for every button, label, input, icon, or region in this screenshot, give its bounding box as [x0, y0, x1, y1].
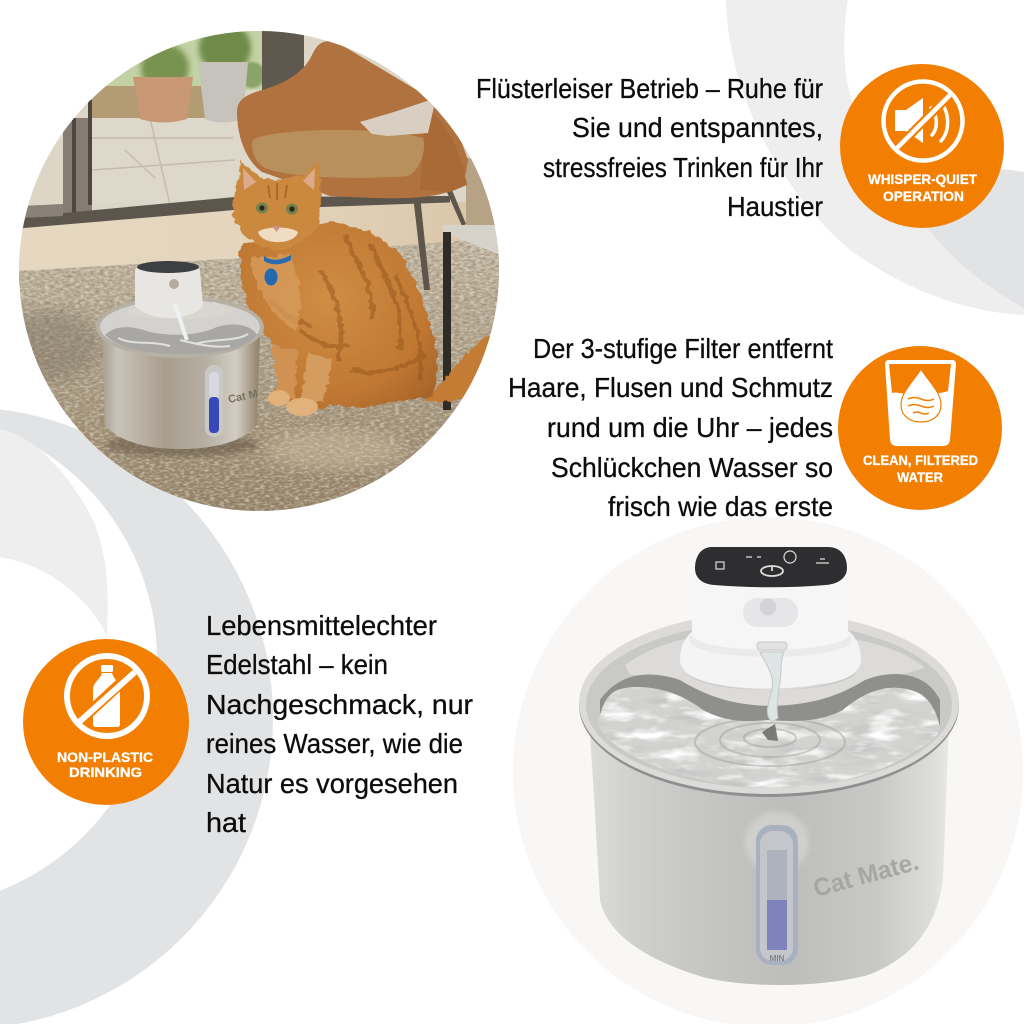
water stream [760, 652, 784, 722]
front legs [272, 345, 297, 398]
text block: stainless steel: Natur es vorgesehen [206, 768, 458, 799]
head [232, 160, 321, 250]
side table [443, 225, 500, 410]
paws [268, 390, 290, 406]
fountain body [589, 720, 949, 985]
text block: filter: frisch wie das erste [608, 491, 833, 522]
small fountain in photo [96, 261, 264, 457]
cat [232, 160, 437, 416]
icon: muted speaker [884, 82, 962, 160]
badge: clean filtered water: WATER [897, 469, 943, 485]
text block: filter: Der 3-stufige Filter entfernt [533, 333, 833, 364]
product backdrop circle [513, 517, 1023, 1024]
text block: filter [508, 333, 833, 522]
dispenser head [680, 547, 861, 690]
text block: stainless steel: reines Wasser, wie die [206, 728, 463, 759]
text block: whisper-quiet [476, 73, 823, 222]
text block: stainless steel: Nachgeschmack, nur [206, 689, 473, 720]
text block: stainless steel [206, 610, 473, 838]
blanket [360, 98, 436, 136]
terracotta pot [133, 77, 193, 122]
text block: stainless steel: Lebensmittelechter [206, 610, 437, 641]
dark control panel [695, 547, 847, 587]
control icons [716, 551, 829, 576]
text block: whisper-quiet: Flüsterleiser Betrieb – Ruhe für [476, 73, 823, 104]
photo: cat beside fountain in a living room [19, 31, 499, 511]
wooden floor [19, 201, 499, 284]
badge: non-plastic drinking [23, 639, 189, 805]
text block: whisper-quiet: Sie und entspanntes, [572, 112, 823, 143]
text block: stainless steel: hat [206, 807, 246, 838]
text block: filter: Schlückchen Wasser so [551, 452, 833, 483]
collar and tag [264, 255, 291, 264]
inner platform [625, 632, 925, 706]
badge: clean filtered water [838, 346, 1002, 510]
background shapes: bottom left [0, 407, 273, 1024]
text block: filter: rund um die Uhr – jedes [547, 412, 833, 443]
text block: whisper-quiet: Haustier [727, 191, 823, 222]
curtain [466, 158, 494, 225]
badge: non-plastic drinking: DRINKING [69, 764, 142, 780]
background shapes: top right [726, 0, 1024, 315]
text block: filter: Haare, Flusen und Schmutz [508, 372, 833, 403]
sensor [743, 598, 798, 627]
main product: stainless steel fountain [579, 547, 959, 985]
photo logo: Cat M [227, 388, 259, 406]
water level window [745, 812, 809, 965]
seat cushion [252, 130, 424, 178]
min label: MIN [770, 954, 785, 963]
badge: clean filtered water: CLEAN, FILTERED [863, 452, 978, 468]
badge: whisper-quiet operation: OPERATION [883, 188, 964, 204]
spout [757, 642, 787, 650]
badge: whisper-quiet operation: WHISPER-QUIET [868, 171, 977, 187]
badge: whisper-quiet operation [840, 64, 1004, 228]
icon: glass with water drop [885, 360, 956, 446]
badge: non-plastic drinking: NON-PLASTIC [57, 749, 153, 765]
text block: whisper-quiet: stressfreies Trinken für Ihr [543, 152, 823, 183]
window and terrace [19, 31, 499, 266]
cat tail [425, 335, 495, 403]
water surface [598, 687, 940, 788]
rug [19, 238, 499, 511]
text block: stainless steel: Edelstahl – kein [206, 649, 388, 680]
brand logo: Cat Mate. [810, 848, 922, 903]
armchair [237, 41, 468, 290]
icon: crossed-out bottle [67, 656, 147, 736]
rim [579, 613, 959, 797]
grey pot [198, 62, 248, 122]
